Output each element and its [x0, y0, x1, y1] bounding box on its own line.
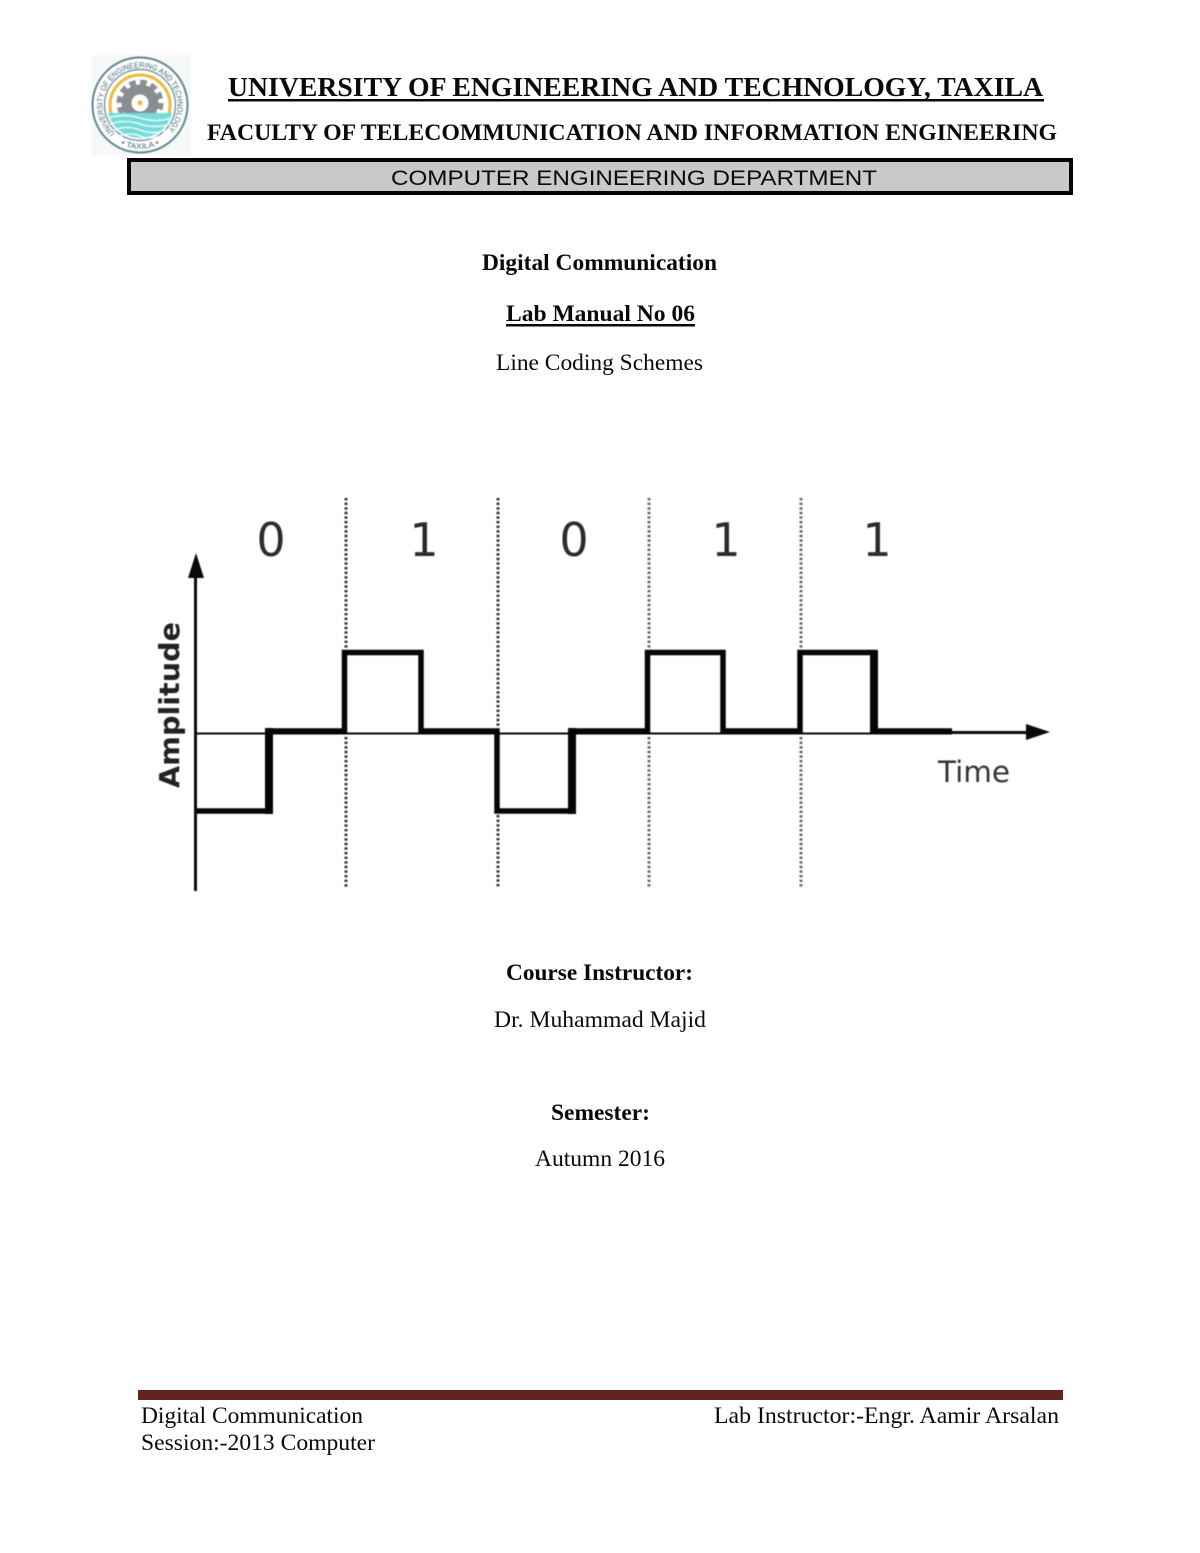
text block: lab topic: Line Coding Schemes	[496, 350, 703, 375]
footer: session: Session:-2013 Computer	[141, 1430, 375, 1455]
icon: university logo: • TAXILA •	[121, 140, 159, 150]
chart: bit boundary lines	[346, 498, 801, 888]
chart: bit labels: 1	[862, 513, 892, 567]
footer: course name: Digital Communication	[141, 1403, 364, 1428]
text block: lab manual number: Lab Manual No 06	[506, 301, 695, 326]
text block: instructor name: Dr. Muhammad Majid	[494, 1007, 707, 1032]
chart: line coding waveform	[153, 498, 1050, 891]
chart: bit labels: 0	[559, 513, 589, 567]
chart: amplitude label: Amplitude	[153, 622, 186, 788]
text block: instructor heading: Course Instructor:	[506, 960, 693, 985]
text block: course title: Digital Communication	[482, 250, 717, 275]
chart: bit labels: 0	[256, 513, 286, 567]
text block: semester value: Autumn 2016	[535, 1146, 665, 1171]
chart: time axis	[196, 724, 1050, 740]
heading: faculty name: FACULTY OF TELECOMMUNICATION AND INFORMATION ENGINEERING	[207, 120, 1057, 145]
panel: department banner: COMPUTER ENGINEERING DEPARTMENT	[391, 166, 877, 190]
chart: time label: Time	[937, 755, 1010, 789]
footer rule	[138, 1390, 1063, 1400]
panel: department banner	[129, 160, 1071, 193]
footer: lab instructor: Lab Instructor:-Engr. Aamir Arsalan	[714, 1403, 1060, 1428]
chart: bit labels: 1	[711, 513, 741, 567]
chart: amplitude axis	[188, 553, 204, 891]
title: university name: UNIVERSITY OF ENGINEERING AND TECHNOLOGY, TAXILA	[228, 72, 1044, 102]
chart: bit labels: 1	[409, 513, 439, 567]
chart: bit labels	[256, 513, 892, 567]
text block: semester heading: Semester:	[551, 1100, 650, 1125]
icon: university logo: UNIVERSITY OF ENGINEERING AND TECHNOLOGY	[96, 61, 184, 137]
chart: signal waveform	[196, 650, 952, 814]
